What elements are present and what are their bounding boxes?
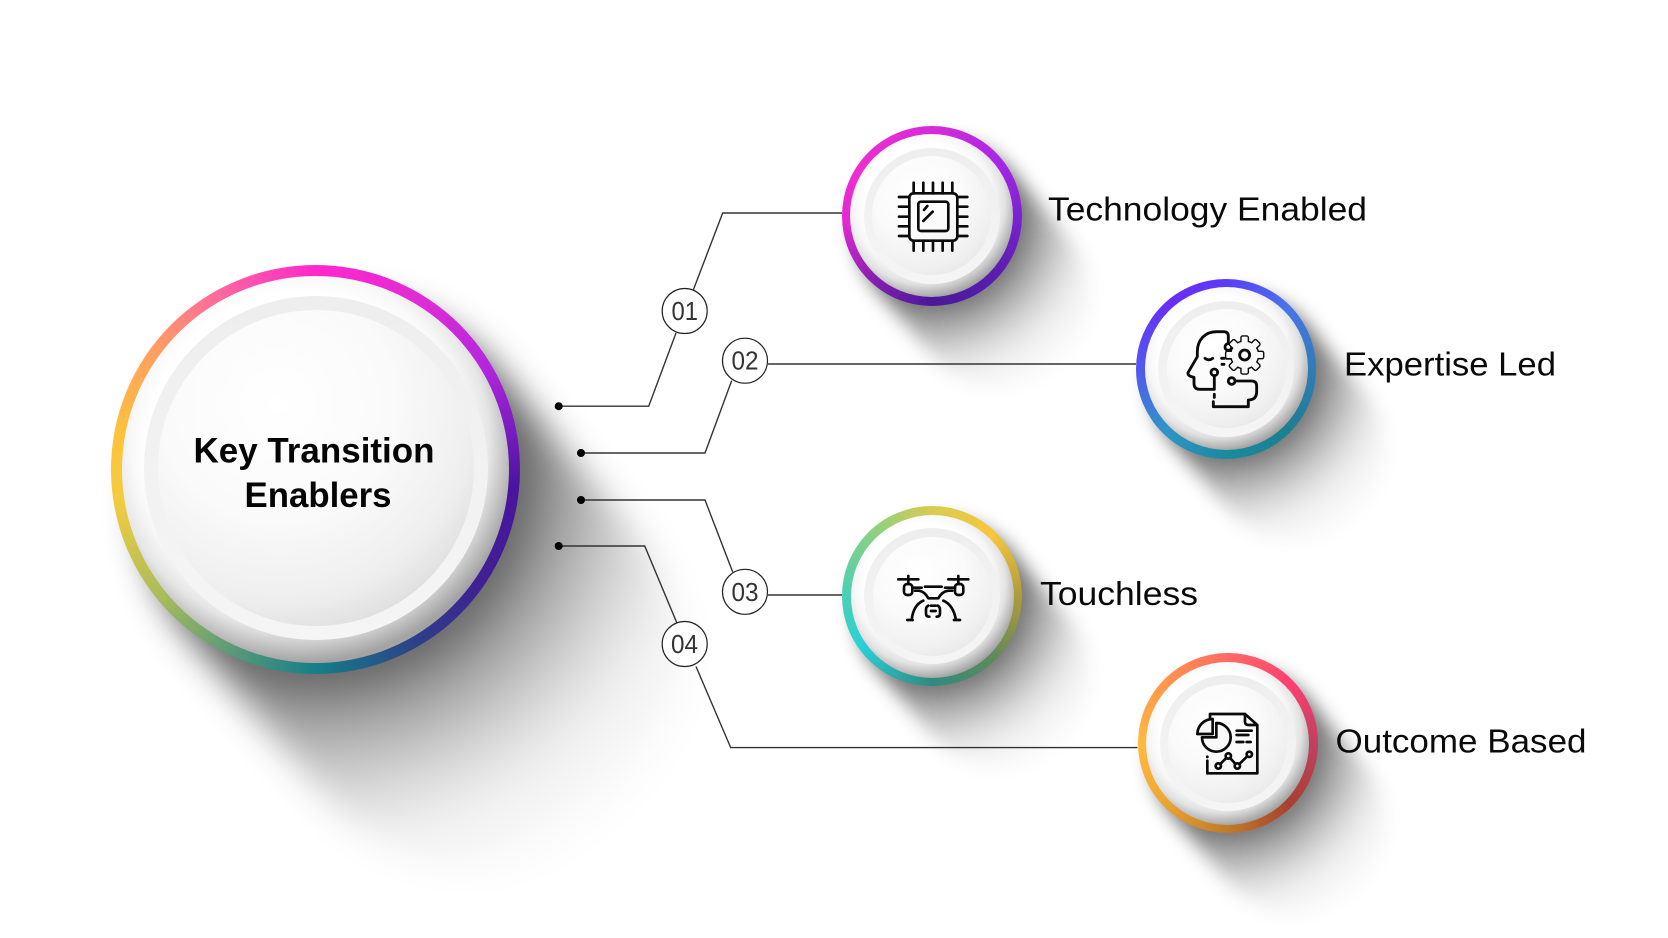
label: Technology Enabled: Technology Enabled (1048, 191, 1367, 228)
icon: report with pie chart (1197, 714, 1257, 773)
label: Expertise Led: Expertise Led (1344, 346, 1556, 383)
icon: drone (898, 576, 968, 620)
icon: microchip (899, 183, 967, 251)
heading: Enablers (244, 476, 392, 515)
circle 4 (1138, 653, 1318, 833)
connector 04 (555, 542, 1138, 748)
main circle: Key Transition Enablers (111, 264, 520, 674)
number badge 04 (662, 622, 707, 666)
number badge 01 (662, 288, 707, 334)
heading (194, 432, 434, 515)
icon: head with gear (1188, 332, 1263, 407)
connector 02 (577, 364, 1136, 457)
number badge 03 (722, 569, 768, 614)
label: Touchless: Touchless (1040, 575, 1198, 612)
number badge 02 (722, 338, 768, 383)
shadows (345, 231, 1296, 824)
circle 3 (842, 506, 1022, 686)
heading: Key Transition (194, 432, 434, 470)
number badge 04: 04 (671, 629, 698, 659)
circle 1 (842, 126, 1022, 306)
number badge 03: 03 (732, 577, 758, 607)
number badge 02: 02 (732, 346, 758, 376)
connector 01 (555, 213, 842, 410)
label: Outcome Based: Outcome Based (1336, 722, 1586, 759)
number badge 01: 01 (672, 296, 698, 326)
circle 2 (1136, 278, 1316, 458)
connector 03 (577, 496, 842, 595)
